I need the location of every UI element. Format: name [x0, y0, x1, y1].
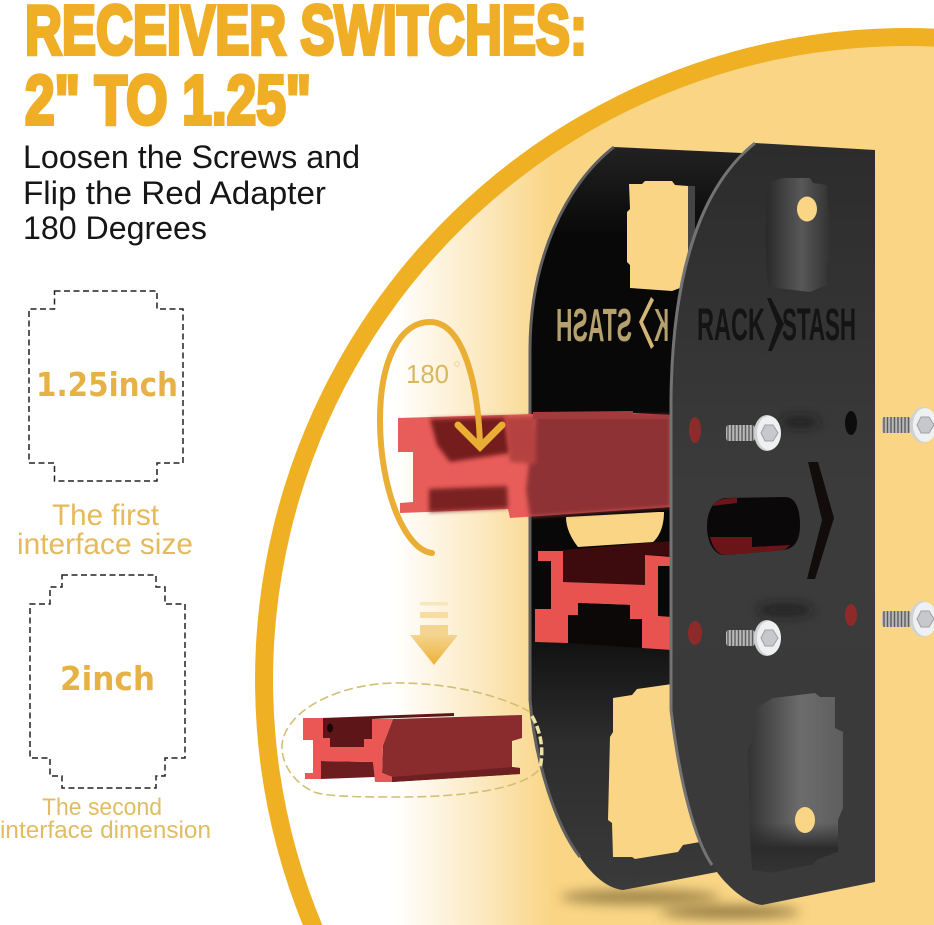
cream gradient circle fill: [263, 39, 934, 925]
center slot: [707, 497, 800, 555]
middle red adapter: [535, 541, 672, 650]
dashed 2 inch interface outline: [30, 575, 185, 788]
second interface caption: The second: [42, 794, 162, 821]
front plate: STASH: [782, 299, 856, 350]
adapter cavities: [323, 713, 454, 747]
back plate: K: [654, 299, 669, 351]
title: [25, 0, 587, 139]
chevron cutout: [807, 462, 834, 579]
title: 2" TO 1.25": [25, 61, 311, 139]
1.25inch label: 1.25inch: [36, 365, 178, 404]
back plate: STASH: [556, 299, 632, 351]
front plate upper window: [766, 178, 830, 292]
instruction text: Loosen the Screws and: [23, 139, 360, 175]
slot red details: [710, 498, 790, 555]
second interface caption: [0, 794, 211, 844]
first interface caption: interface size: [17, 528, 193, 561]
rotation arc arrow with 180 degree label: [380, 322, 502, 553]
front plate lower hole: [795, 807, 815, 833]
instruction text: [23, 139, 360, 246]
instruction text: 180 Degrees: [23, 210, 207, 246]
golden circle ring: [255, 28, 934, 925]
front logo chevron: [767, 298, 784, 351]
screw: upper on plate: [726, 415, 781, 451]
screw: lower right: [882, 601, 934, 637]
main face: [526, 415, 671, 517]
ground shadows: [560, 890, 800, 918]
back plate middle opening: [566, 512, 664, 547]
dashed 1.25 inch interface outline: [29, 291, 183, 481]
screw shadows: [757, 416, 820, 617]
first interface caption: The first: [52, 499, 160, 532]
screw: upper right: [882, 407, 934, 443]
adapter pin hole: [327, 724, 333, 732]
detached red adapter in dashed oval: [282, 683, 542, 797]
screw: lower on plate: [726, 620, 781, 656]
front plate left edge highlight: [671, 143, 755, 865]
front plate: [671, 143, 875, 905]
front plate lower window: [748, 693, 843, 873]
upper red adapter being flipped: [398, 411, 671, 518]
second interface caption: interface dimension: [0, 817, 211, 844]
back plate left edge highlight: [530, 147, 614, 857]
logo on front plate: RACK: [697, 299, 765, 350]
back plate lower window: [608, 680, 700, 859]
adapter face: [382, 715, 522, 782]
front plate upper hole: [797, 196, 817, 222]
lower window bottom shading: [748, 693, 843, 873]
down arrow: [410, 602, 458, 665]
180 label: 180: [406, 359, 449, 389]
instruction text: Flip the Red Adapter: [23, 175, 326, 211]
back plate: [530, 147, 742, 890]
lower cavity shading: [429, 486, 508, 512]
degree mark: [455, 362, 459, 366]
2inch label: 2inch: [60, 659, 155, 698]
upper cavity shading: [430, 417, 510, 462]
mirrored chevron on back plate: [639, 297, 654, 349]
back plate upper window: [627, 181, 688, 291]
back plate upper window side: [688, 186, 695, 286]
adapter bright profile: [303, 718, 393, 782]
plate holes: [688, 411, 857, 645]
first interface caption: [17, 499, 193, 561]
